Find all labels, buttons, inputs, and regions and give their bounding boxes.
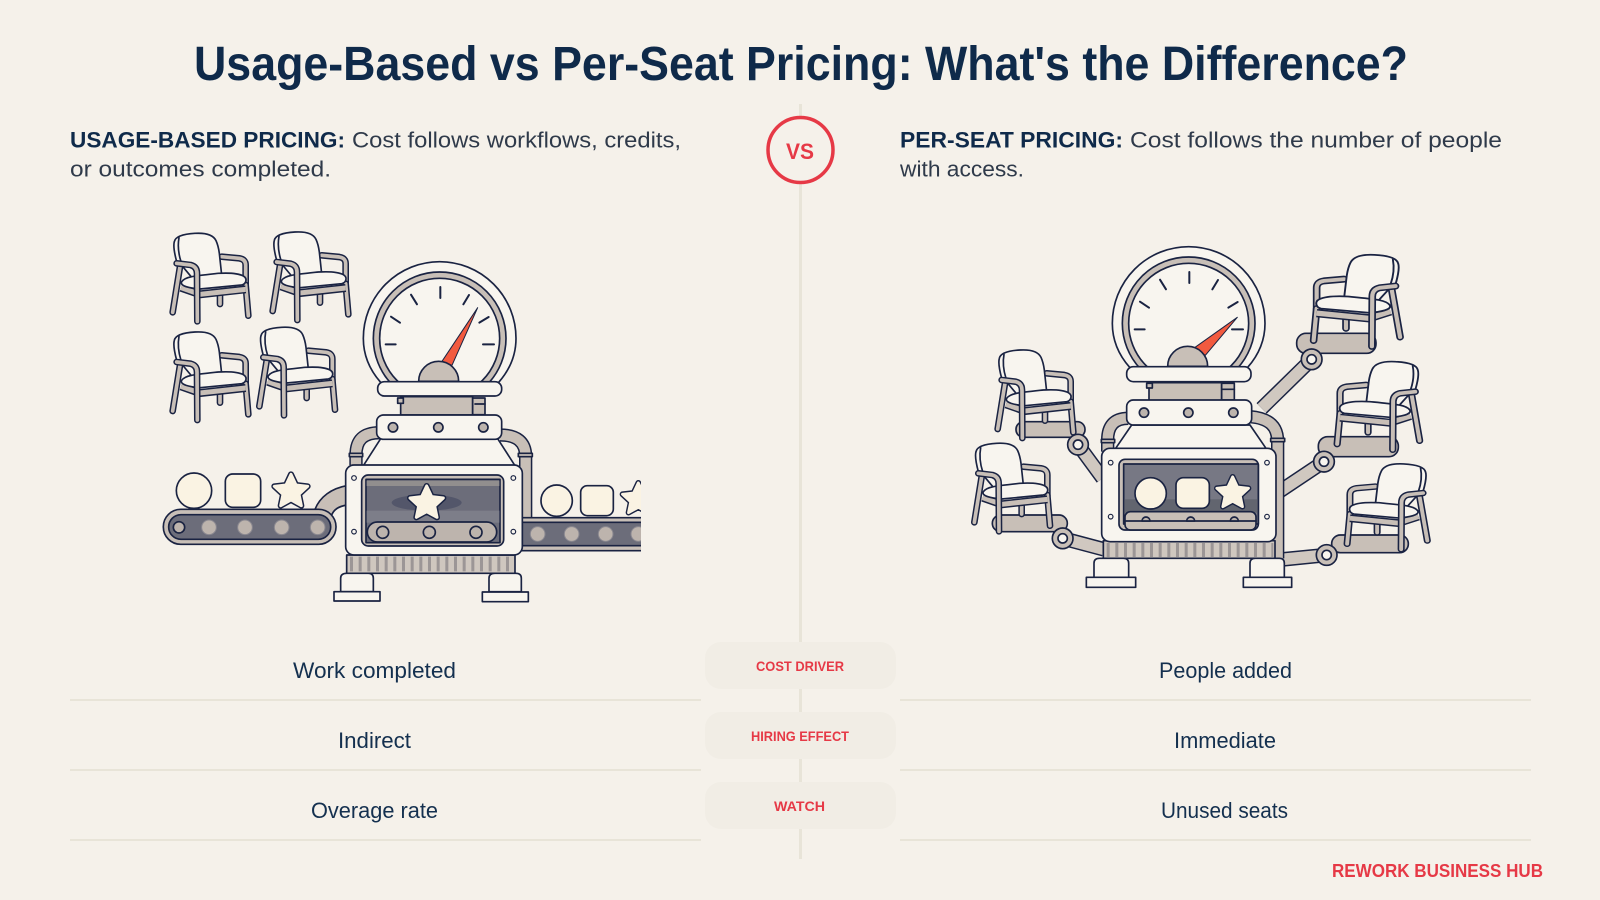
icon: side pipes bbox=[349, 433, 532, 518]
icon: gauge dial bbox=[363, 262, 516, 405]
per-seat description bbox=[899, 128, 1502, 182]
illustration: usage-based machine bbox=[163, 232, 654, 602]
icon: side pipes bbox=[1101, 417, 1285, 558]
comparison row: cost driver: COST DRIVER bbox=[756, 658, 844, 674]
icon: right conveyor bbox=[517, 483, 654, 551]
icon: idle chairs bbox=[173, 232, 348, 420]
icon: seat trays bbox=[992, 333, 1408, 553]
icon: gauge dial bbox=[1112, 247, 1265, 390]
comparison row: watch: Unused seats bbox=[1161, 798, 1288, 823]
row rules: left bbox=[70, 699, 701, 841]
comparison row: cost driver bbox=[293, 642, 1292, 689]
comparison row: cost driver: People added bbox=[1159, 658, 1292, 683]
icon: left pipe bbox=[315, 486, 347, 515]
usage-based description: or outcomes completed. bbox=[70, 156, 331, 182]
vs badge: VS bbox=[786, 139, 814, 164]
comparison row: hiring effect: Immediate bbox=[1174, 728, 1276, 753]
icon: machine body bbox=[1086, 383, 1292, 587]
row rules: right bbox=[900, 699, 1531, 841]
comparison row: hiring effect: Indirect bbox=[338, 728, 411, 753]
comparison row: cost driver: Work completed bbox=[293, 658, 456, 683]
usage-based description bbox=[70, 128, 681, 182]
usage-based description: USAGE-BASED PRICING: bbox=[70, 128, 345, 152]
comparison row: watch: Overage rate bbox=[311, 798, 438, 823]
vs badge bbox=[768, 118, 833, 182]
icon: machine body bbox=[334, 397, 528, 602]
icon: robot arms bbox=[1063, 359, 1327, 559]
icon: connected chairs bbox=[974, 255, 1427, 549]
comparison row: watch: WATCH bbox=[774, 798, 825, 814]
footer brand: REWORK BUSINESS HUB bbox=[1332, 861, 1543, 881]
per-seat description: Cost follows the number of people bbox=[1130, 128, 1502, 152]
per-seat description: PER-SEAT PRICING: bbox=[900, 128, 1123, 152]
per-seat description: with access. bbox=[899, 156, 1024, 182]
icon: left conveyor bbox=[163, 473, 336, 544]
usage-based description: Cost follows workflows, credits, bbox=[352, 128, 681, 152]
illustration: per-seat machine bbox=[974, 247, 1427, 587]
comparison row: hiring effect: HIRING EFFECT bbox=[751, 728, 849, 744]
comparison row: watch bbox=[311, 782, 1288, 829]
title: Usage-Based vs Per-Seat Pricing: What's the Difference? bbox=[194, 38, 1408, 91]
center divider bbox=[799, 104, 802, 859]
icon: arm joints bbox=[1052, 349, 1337, 565]
comparison row: hiring effect bbox=[338, 712, 1276, 759]
